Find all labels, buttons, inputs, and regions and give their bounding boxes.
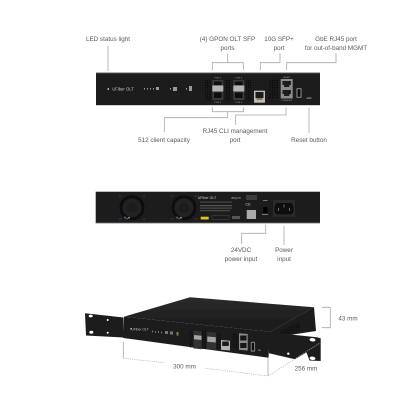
label: Reset button: Reset button <box>291 137 327 144</box>
product label: CE <box>245 202 251 206</box>
icon: fan right <box>171 195 197 220</box>
label: Power input <box>275 226 293 263</box>
label: 512 client capacity <box>138 107 243 144</box>
right rack ear <box>269 332 321 361</box>
dimension: 300 mm <box>123 342 268 376</box>
product label: UBIQUITI <box>231 197 242 200</box>
label: RJ45 CLI management port: port <box>230 137 241 144</box>
front USB and reset <box>251 342 261 352</box>
status LEDs <box>144 86 192 91</box>
front vents <box>189 330 238 349</box>
GPON SFP ports: PON 1 <box>215 78 222 80</box>
RJ45 ports <box>281 77 293 102</box>
isometric device <box>85 297 321 361</box>
left rack ear <box>85 313 124 338</box>
front RJ45 ports <box>239 333 248 350</box>
icon: LED and logo: UFiber OLT <box>112 86 134 92</box>
rear panel device <box>96 192 320 224</box>
label: LED status light <box>86 36 130 71</box>
AC power socket <box>273 200 295 217</box>
chassis front <box>123 317 270 358</box>
product label: UFiber OLT <box>198 196 217 200</box>
label: Power input: Power <box>275 247 293 254</box>
reset <box>306 98 312 99</box>
label: 10G SFP+ port: port <box>274 45 285 52</box>
label: LED status light: LED status light <box>86 36 130 43</box>
RJ45 ports: CONSOLE <box>281 100 293 102</box>
label: RJ45 CLI management port: RJ45 CLI management <box>203 128 268 135</box>
icon: fan left <box>119 195 145 220</box>
label: 10G SFP+ port <box>260 36 294 70</box>
GPON SFP ports: PON 3 <box>215 102 222 104</box>
label: GPON OLT SFP ports: (4) GPON OLT SFP <box>200 36 255 43</box>
front SFP ports <box>193 331 216 350</box>
label: 10G SFP+ port: 10G SFP+ <box>264 36 294 43</box>
GPON SFP ports: PON 4 <box>236 102 243 104</box>
DC power jack <box>262 200 268 215</box>
front panel device <box>96 73 320 105</box>
label: GbE RJ45 port: GbE RJ45 port <box>315 36 357 43</box>
label: Reset button <box>291 108 327 144</box>
label: Power input: input <box>277 256 291 263</box>
front SFP+ port <box>221 340 230 350</box>
10G SFP+ port <box>254 91 265 103</box>
dimension: 300 mm: 300 mm <box>173 364 196 370</box>
side vents <box>280 322 300 334</box>
dimension: 43 mm: 43 mm <box>338 316 358 322</box>
dimension: 43 mm <box>322 307 358 328</box>
dimension: 256 mm <box>268 343 320 376</box>
GPON SFP ports <box>212 78 244 104</box>
label: 24VDC power input: power input <box>225 256 258 263</box>
RJ45 ports: MGMT <box>283 77 291 79</box>
GPON SFP ports: PON 2 <box>236 78 243 80</box>
label: GbE RJ45 port <box>287 36 367 70</box>
label: RJ45 CLI management port <box>203 108 286 144</box>
label: 24VDC power input: 24VDC <box>231 247 252 254</box>
vents <box>205 79 278 101</box>
front logo and LEDs <box>130 328 178 336</box>
USB port <box>296 88 302 98</box>
label: GPON OLT SFP ports: ports <box>220 45 234 52</box>
label: GPON OLT SFP ports <box>200 36 255 70</box>
label: 24VDC power input <box>225 225 266 263</box>
product label <box>198 195 257 220</box>
chassis top <box>124 297 314 332</box>
chassis side <box>270 307 316 338</box>
label: GbE RJ45 port: for out-of-band MGMT <box>305 45 367 52</box>
front logo and LEDs: UFiber OLT <box>131 328 149 332</box>
dimension: 256 mm: 256 mm <box>295 366 317 372</box>
label: 512 client capacity: 512 client capacity <box>138 137 191 144</box>
